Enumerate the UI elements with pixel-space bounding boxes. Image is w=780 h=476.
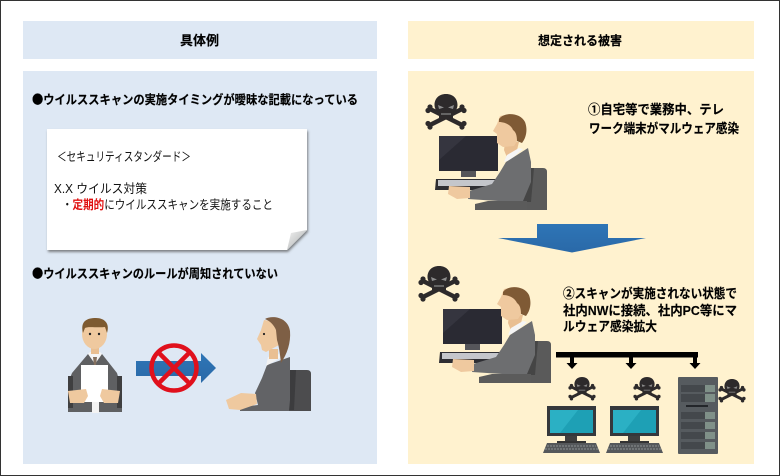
document: security standard note: ＜セキュリティスタンダード＞ xyxy=(57,146,191,165)
icon: skull, second stage xyxy=(418,266,460,302)
network distribution lines xyxy=(556,352,700,369)
arrow: down xyxy=(498,224,646,252)
icon: server rack xyxy=(678,377,718,454)
icon: prohibited mark xyxy=(152,346,196,390)
icon: skull on server xyxy=(718,379,746,402)
icon: seated woman xyxy=(226,317,311,411)
icon: skull on PC 2 xyxy=(633,377,661,400)
text: step 1: ワーク端末がマルウェア感染 xyxy=(589,118,739,137)
icon: skull, first stage xyxy=(425,94,467,130)
icon: man holding document xyxy=(68,318,122,413)
text: step 2: ルウェア感染拡大 xyxy=(563,316,657,335)
icon: worker at desktop, first stage xyxy=(435,114,547,210)
document: security standard note xyxy=(47,129,307,250)
heading: right column: 想定される被害 xyxy=(538,33,622,48)
document: security standard note: ・定期的にウイルススキャンを実施すること xyxy=(62,194,273,213)
heading: left column xyxy=(23,21,377,59)
text: step 2: 社内NWに接続、社内PC等にマ xyxy=(563,303,737,318)
icon: worker at desktop, second stage xyxy=(439,287,551,383)
heading: left column: 具体例 xyxy=(180,33,219,48)
second bullet text: ●ウイルススキャンのルールが周知されていない xyxy=(32,263,278,282)
text: step 1: ①自宅等で業務中、テレ xyxy=(588,99,724,118)
panel: concrete examples xyxy=(23,71,377,464)
icon: PC 2 xyxy=(606,406,663,453)
text: step 1 xyxy=(588,99,739,137)
heading: right column xyxy=(408,21,754,59)
arrow: blocked communication xyxy=(136,346,216,390)
text: step 2: ②スキャンが実施されない状態で xyxy=(563,283,737,302)
text: step 2 xyxy=(563,283,737,335)
panel: expected damage xyxy=(408,71,754,464)
icon: skull on PC 1 xyxy=(568,377,596,400)
document: security standard note: X.X ウイルス対策 xyxy=(54,181,147,196)
icon: PC 1 xyxy=(543,406,600,453)
first bullet text: ●ウイルススキャンの実施タイミングが曖昧な記載になっている xyxy=(32,89,358,108)
